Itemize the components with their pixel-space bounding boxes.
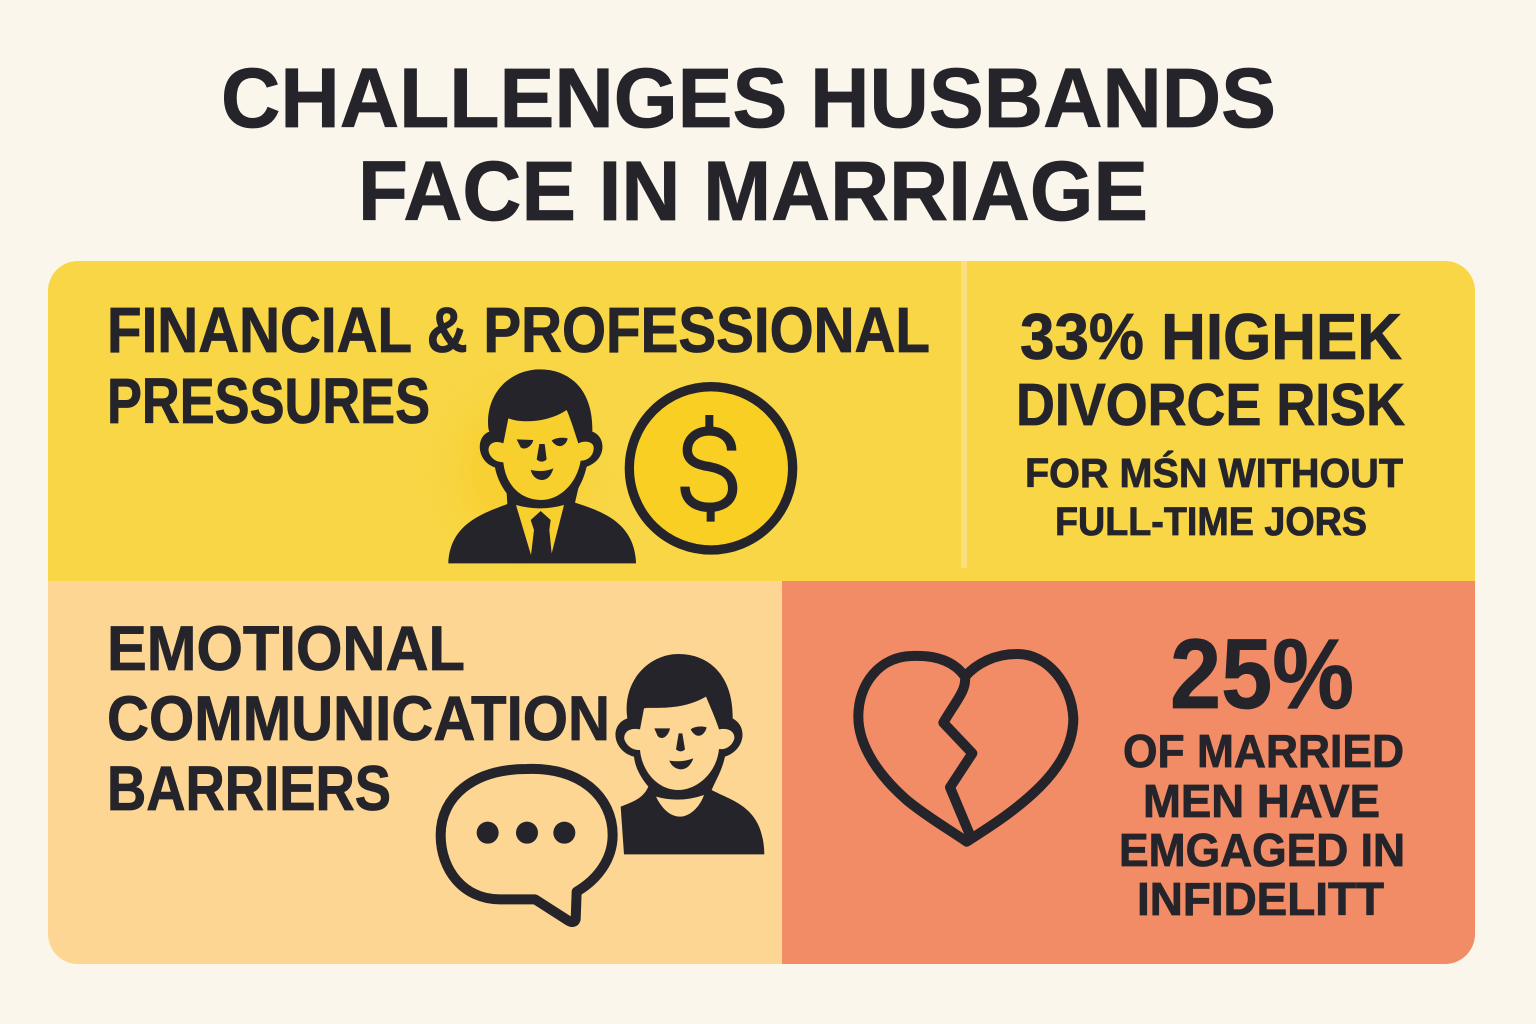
stat description: men without full-time jobs: FULL-TIME JORS [1055, 500, 1367, 544]
stat headline: 33% higher divorce risk: 33% HIGHEK [1020, 300, 1402, 373]
stat number: 25%: 25% [1170, 618, 1354, 729]
panel: card background [48, 261, 1475, 964]
title: FACE IN MARRIAGE [358, 144, 1148, 238]
icon: businessman [448, 369, 636, 563]
heading: financial and professional pressures: PRESSURES [107, 365, 430, 437]
panel: infidelity statistic [858, 618, 1405, 925]
panel: divorce risk statistic [1016, 300, 1405, 544]
heading: emotional communication barriers [107, 614, 610, 824]
panel: emotional communication barriers [107, 614, 764, 922]
heading: financial and professional pressures: FINANCIAL & PROFESSIONAL [107, 294, 930, 366]
stat headline: 33% higher divorce risk [1016, 300, 1405, 438]
stat description: men without full-time jobs: FOR MŚN WITHOUT [1025, 450, 1403, 496]
icon: speech bubble [441, 769, 613, 922]
stat headline: 33% higher divorce risk: DIVORCE RISK [1016, 372, 1405, 438]
icon: man [615, 654, 764, 854]
panel: financial and professional pressures [107, 294, 930, 563]
stat description: married men infidelity: EMGAGED IN [1119, 824, 1405, 876]
heading: financial and professional pressures [107, 294, 930, 437]
stat description: married men infidelity: OF MARRIED [1123, 725, 1404, 777]
stat description: married men infidelity [1119, 725, 1405, 925]
heading: emotional communication barriers: EMOTIONAL [107, 614, 465, 684]
icon: broken heart [858, 654, 1073, 842]
stat description: married men infidelity: INFIDELITT [1137, 873, 1384, 925]
stat description: married men infidelity: MEN HAVE [1143, 775, 1380, 827]
heading: emotional communication barriers: COMMUNICATION [107, 684, 610, 754]
heading: emotional communication barriers: BARRIERS [107, 754, 391, 824]
stat description: men without full-time jobs [1025, 450, 1403, 544]
title: CHALLENGES HUSBANDS [221, 51, 1276, 145]
icon: dollar coin [629, 387, 793, 550]
title [221, 51, 1276, 238]
